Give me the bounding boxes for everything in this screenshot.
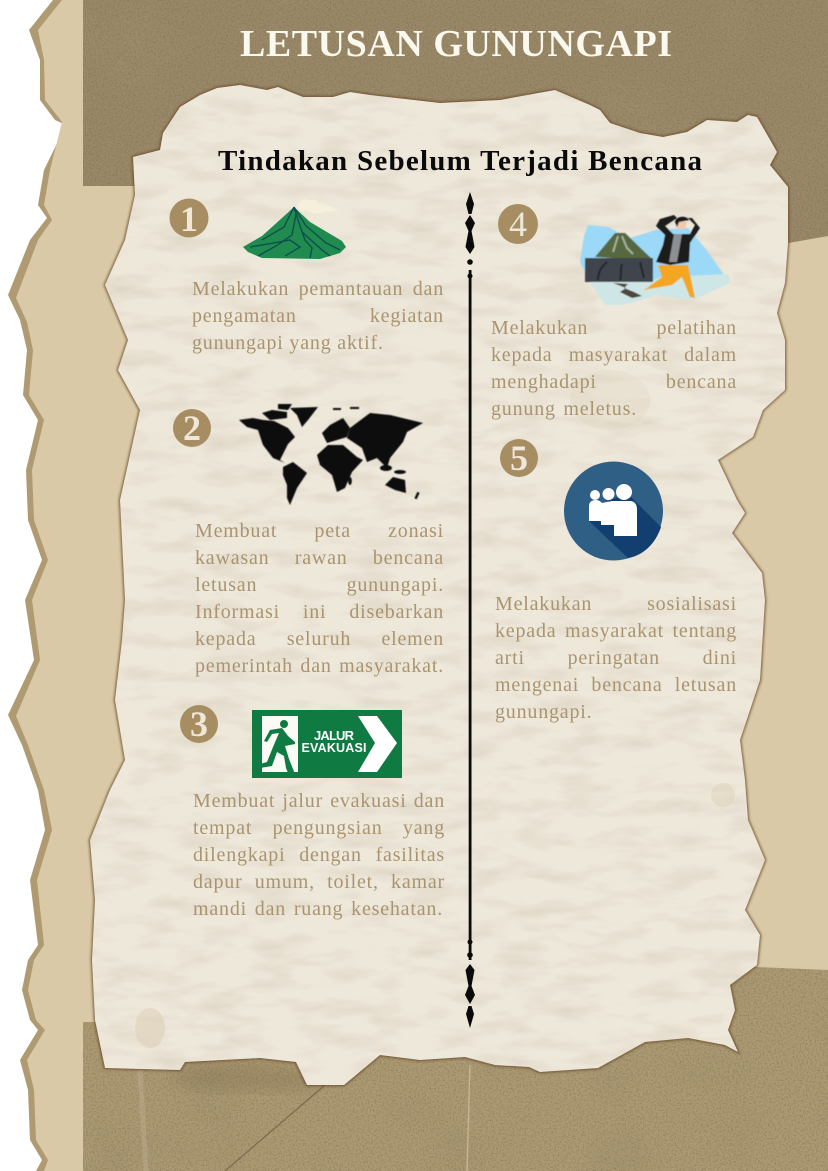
icon: community circle [564,462,663,560]
text block: step 2: kepada seluruh elemen [195,628,444,650]
icon: evacuation route sign: EVAKUASI [302,741,366,755]
text block: step 5 [495,593,737,723]
step badge 5: 5 [510,438,528,478]
text block: step 4 [491,317,737,420]
text block: step 1: gunungapi yang aktif. [192,332,384,354]
icon: green volcano with smoke [243,199,346,259]
text block: step 2 [195,520,444,677]
icon: evacuation route sign [252,710,402,778]
step badge 1: 1 [180,199,198,239]
step badge 2: 2 [183,408,201,448]
text block: step 2: Membuat peta zonasi [195,520,444,542]
text block: step 3: mandi dan ruang kesehatan. [193,898,443,920]
step badge 5 [500,438,538,478]
text block: step 2: letusan gunungapi. [195,574,444,596]
text block: step 4: kepada masyarakat dalam [491,344,737,366]
step badge 4: 4 [509,204,527,244]
step badge 3: 3 [190,704,208,744]
panel: torn left strip [8,0,153,1171]
text block: step 2: kawasan rawan bencana [195,547,444,569]
text block: step 3: tempat pengungsian yang [193,817,445,839]
step badge 2 [173,408,211,448]
icon: evacuation route sign: JALUR [314,728,355,743]
divider [465,192,475,1028]
heading: Tindakan Sebelum Terjadi Bencana [218,145,702,177]
text block: step 3: Membuat jalur evakuasi dan [193,790,445,812]
panel: burnt parchment sheet [80,80,800,1090]
text block: step 5: Melakukan sosialisasi [495,593,737,615]
text block: step 3: dilengkapi dengan fasilitas [193,844,445,866]
text block: step 5: gunungapi. [495,701,592,723]
text block: step 1: pengamatan kegiatan [192,305,444,327]
panel: right cream block [700,235,828,975]
text block: step 4: Melakukan pelatihan [491,317,737,339]
text block: step 3: dapur umum, toilet, kamar [193,871,445,893]
text block: step 1: Melakukan pemantauan dan [192,278,444,300]
icon: volcano training figure [580,215,730,305]
text block: step 2: pemerintah dan masyarakat. [195,655,444,677]
step badge 1 [170,198,208,239]
text block: step 3 [193,790,445,920]
text block: step 4: menghadapi bencana [491,371,737,393]
step badge 4 [498,204,538,244]
step badge 3 [180,704,218,744]
title: LETUSAN GUNUNGAPI [240,23,672,65]
text block: step 5: arti peringatan dini [495,647,737,669]
text block: step 1 [192,278,444,354]
text block: step 4: gunung meletus. [491,398,637,420]
text block: step 2: Informasi ini disebarkan [195,601,444,623]
icon: world map [239,404,423,505]
text block: step 5: mengenai bencana letusan [495,674,737,696]
text block: step 5: kepada masyarakat tentang [495,620,737,642]
